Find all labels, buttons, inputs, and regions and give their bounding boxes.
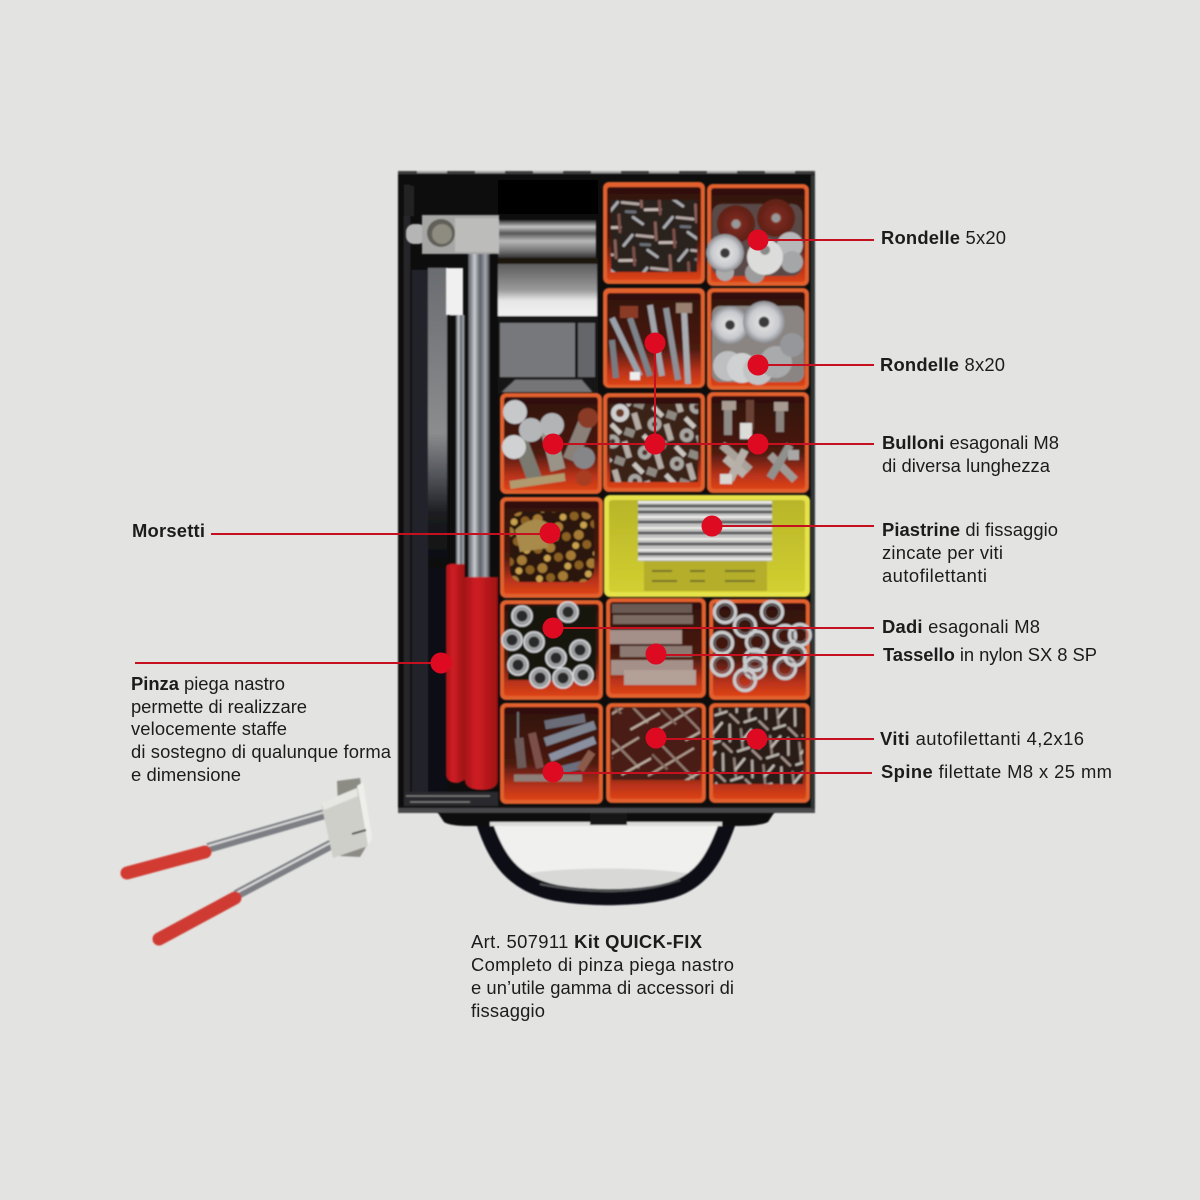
bin: yellow fixing plates [604,495,810,597]
bin: self-tapping screws [709,703,810,803]
bin: washers 5x20 [706,184,809,286]
label: Piastrine: zincate per viti [882,542,1003,563]
bin: threaded pins [500,703,603,804]
callout: Tassello marker [646,644,874,664]
left interior wall [404,185,410,795]
label: Dadi: Dadi esagonali M8 [882,616,1040,637]
bin: spring washers [709,599,810,700]
label: Rondelle 5x20: Rondelle 5x20 [881,227,1006,248]
bending pliers stored in case [406,215,596,790]
label: Pinza description [131,673,392,785]
callout: Spine marker [542,762,872,782]
callout: Pinza marker [135,652,452,674]
callout: Piastrine marker [702,516,874,536]
back plate [498,180,598,214]
label: Spine: Spine filettate M8 x 25 mm [881,761,1112,782]
callout: Rondelle 5x20 marker [748,230,874,250]
storage bins [500,182,810,804]
label: Morsetti: Morsetti [132,520,205,541]
callout: Morsetti marker [211,522,560,544]
label: Bulloni: di diversa lunghezza [882,455,1051,476]
label: Pinza description: velocemente staffe [131,718,287,739]
bin: small screws [603,182,705,284]
bin: nylon plugs [606,598,706,698]
callout: Bulloni markers [542,332,874,454]
callout: Rondelle 8x20 marker [748,354,874,376]
bin: hex bolts [707,392,809,493]
callout: Dadi marker [542,618,874,638]
bin: washers 8x20 [707,288,809,390]
carrying handle [436,810,776,897]
bin: mixed hardware [603,393,705,492]
label: Pinza description: permette di realizzare [131,696,307,717]
label: Piastrine [882,519,1058,586]
product description [471,931,734,1021]
product description: fissaggio [471,1000,545,1021]
icon: bending pliers photo [127,778,372,939]
product description: e un’utile gamma di accessori di [471,977,734,998]
label: Rondelle 8x20: Rondelle 8x20 [880,354,1005,375]
label: Bulloni [882,432,1059,476]
bin: clamps [500,497,603,598]
metal case [398,171,815,813]
label: Piastrine: autofilettanti [882,565,987,586]
label: Pinza description: e dimensione [131,764,241,785]
bin: long bolts [603,288,705,388]
label: Pinza description: di sostegno di qualunque forma [131,741,392,762]
label: Bulloni: Bulloni esagonali M8 [882,432,1059,453]
label: Viti: Viti autofilettanti 4,2x16 [880,728,1084,749]
product description: Art. 507911 Kit QUICK-FIX [471,931,703,952]
label: Piastrine: Piastrine di fissaggio [882,519,1058,540]
bin: hex nuts [500,600,603,700]
label: Tassello: Tassello in nylon SX 8 SP [883,644,1097,665]
bin: long screws [606,703,706,803]
bin: large bolts [500,393,602,494]
callout: Viti markers [646,728,874,750]
product description: Completo di pinza piega nastro [471,954,734,975]
label: Pinza description: Pinza piega nastro [131,673,285,694]
callout lines and dots [135,230,874,782]
